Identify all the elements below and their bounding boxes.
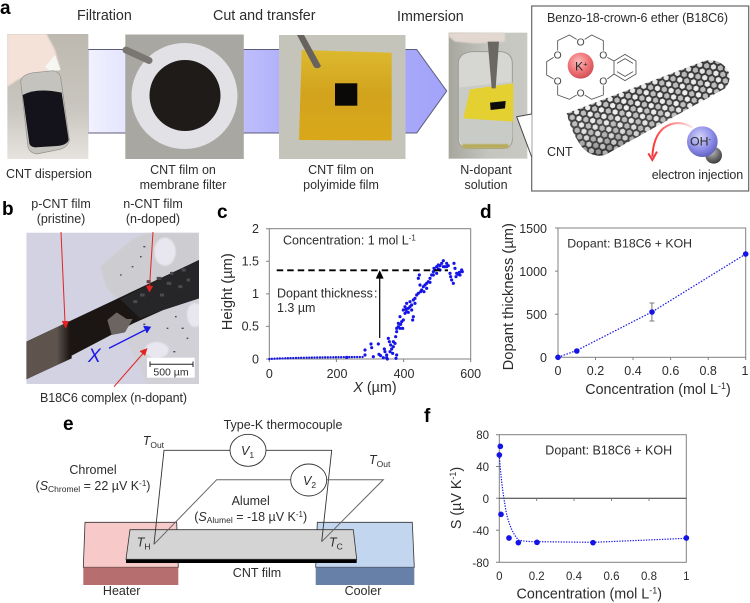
- x tick labels: 0.6: [604, 571, 620, 583]
- voltmeter V2: [291, 464, 327, 496]
- label: cooler: Cooler: [345, 584, 381, 598]
- label: dopant thickness: 1.3 µm: [277, 301, 315, 315]
- x axis title: -1: [649, 586, 657, 596]
- x tick labels: [555, 364, 749, 378]
- voltmeter V2: 2: [311, 480, 316, 490]
- x axis title: X (µm): [352, 380, 397, 396]
- axes frame: [499, 435, 686, 562]
- molecule: crown ether with K+: [547, 35, 636, 99]
- y tick labels: 0.5: [242, 320, 259, 334]
- panel b: micrograph: [2, 197, 203, 405]
- label: X axis direction: X: [87, 346, 102, 367]
- photo: N-dopant solution: [449, 33, 527, 159]
- red arrow to dopant: [114, 349, 147, 387]
- label: concentration: -1: [409, 234, 416, 242]
- label: dopant thickness: :: [374, 286, 377, 300]
- label: alumel: (S: [194, 510, 207, 524]
- voltmeter V1: [230, 434, 266, 466]
- panel letter b: b: [2, 199, 14, 220]
- label: dopant: Dopant: B18C6 + KOH: [567, 237, 692, 251]
- axes frame: [558, 228, 746, 357]
- panel f: Seebeck coefficient chart: [424, 406, 690, 602]
- red arrow to n-CNT: [147, 232, 153, 292]
- y axis title: S (µV K: [449, 480, 465, 529]
- electron injection arrow: [648, 123, 692, 160]
- carbon nanotube: [567, 60, 730, 156]
- label: T out right: Out: [377, 459, 391, 469]
- y tick labels: -40: [472, 526, 489, 538]
- voltmeter V1: 1: [249, 450, 254, 460]
- x tick labels: 0.4: [566, 571, 583, 583]
- label: T cold: T: [329, 536, 337, 550]
- label: T cold: C: [337, 542, 343, 552]
- voltmeter V1: V: [241, 444, 249, 458]
- molecule: crown ether with K+: O: [577, 37, 585, 48]
- red arrow to p-CNT: [61, 232, 68, 328]
- molecule: crown ether with K+: O: [599, 77, 607, 88]
- photo: CNT film on polyimide film: [279, 35, 406, 159]
- label: dopant: Dopant: B18C6 + KOH: [545, 443, 672, 457]
- micrograph image: [26, 233, 203, 384]
- label: chromel: ): [146, 479, 150, 493]
- y tick labels: [519, 222, 547, 365]
- hydroxide ion: OH: [690, 135, 708, 149]
- label: B18C6 complex: B18C6 complex (n-dopant): [40, 391, 187, 405]
- x axis title: Concentration (mol L: [585, 382, 718, 398]
- caption: N-dopant solution: N-dopant: [460, 163, 512, 177]
- x tick labels: 0: [555, 364, 562, 378]
- molecule: crown ether with K+: O: [554, 77, 562, 88]
- caption: N-dopant solution: solution: [464, 178, 508, 192]
- y tick labels: 2: [252, 222, 259, 236]
- thickness arrow: [377, 272, 383, 338]
- y tick labels: -80: [472, 558, 489, 570]
- label: alumel: Alumel: [232, 494, 270, 508]
- step label: cut and transfer: Cut and transfer: [213, 8, 316, 24]
- y axis title: ): [449, 467, 465, 472]
- scale bar: [147, 358, 195, 378]
- caption: CNT film on membrane filter: CNT film on: [150, 163, 216, 177]
- y tick labels: 1500: [519, 222, 547, 236]
- y tick labels: 1.5: [242, 254, 259, 268]
- label: heater: Heater: [103, 584, 140, 598]
- x tick labels: 0: [496, 571, 503, 583]
- chromel wires: [154, 450, 332, 544]
- x tick labels: 0.8: [641, 571, 657, 583]
- x axis title: ): [657, 586, 662, 602]
- data series: [555, 251, 748, 360]
- label: p-CNT film: p-CNT film: [31, 197, 91, 211]
- y tick labels: 0: [540, 351, 547, 365]
- voltmeter V2: V: [303, 474, 311, 488]
- panel a: fabrication flow: [0, 0, 749, 192]
- x axis title: Concentration (mol L: [517, 586, 649, 602]
- panel d: thickness vs concentration chart: [480, 202, 749, 398]
- y tick labels: 0: [483, 494, 489, 506]
- step label: filtration: Filtration: [77, 8, 132, 24]
- label: T out left: Out: [150, 440, 165, 450]
- label: T out right: T: [369, 453, 377, 467]
- y tick labels: [242, 222, 259, 366]
- axes frame: [269, 229, 471, 359]
- error bar: [650, 303, 654, 321]
- label: alumel: = -18 µV K: [233, 510, 297, 524]
- photo: CNT dispersion: [7, 34, 88, 159]
- x axis title: ): [726, 382, 731, 398]
- panel c: height profile chart: [217, 202, 481, 396]
- panel letter c: c: [217, 202, 228, 223]
- x tick labels: [266, 367, 481, 381]
- y tick labels: [472, 430, 489, 570]
- x tick labels: 600: [460, 367, 481, 381]
- label: chromel: = 22 µV K: [80, 479, 140, 493]
- process arrow: [88, 50, 447, 133]
- panel e: measurement schematic: [36, 414, 414, 598]
- heater block: [83, 522, 178, 585]
- label: CNT: CNT: [547, 145, 573, 159]
- label: chromel: Chromel: [48, 484, 80, 494]
- y tick labels: 0: [252, 352, 259, 366]
- molecule: crown ether with K+: +: [583, 59, 588, 68]
- y tick labels: 40: [476, 462, 489, 474]
- label: chromel: (S: [36, 479, 48, 493]
- label: CNT film: CNT film: [233, 566, 281, 580]
- molecule: crown ether with K+: K: [575, 59, 583, 73]
- label: p-CNT film: (pristine): [37, 212, 85, 226]
- photo: CNT film on membrane filter: [125, 34, 244, 159]
- hydroxide ion: -: [708, 135, 711, 144]
- molecule: crown ether with K+: O: [554, 51, 562, 62]
- scale bar: 500 µm: [153, 366, 189, 378]
- molecule: crown ether with K+: O: [599, 51, 607, 62]
- label: T hot: H: [144, 542, 150, 552]
- x tick labels: 200: [327, 367, 347, 381]
- x tick labels: 0.4: [624, 364, 642, 378]
- alumel wires: [154, 480, 383, 544]
- x tick labels: 0.2: [587, 364, 604, 378]
- x tick labels: [496, 571, 690, 583]
- hydroxide ion: [687, 126, 722, 164]
- y tick labels: 80: [476, 430, 489, 442]
- cooler block: [316, 522, 414, 585]
- y tick labels: 1000: [519, 265, 547, 279]
- caption: CNT film on membrane filter: membrane filter: [140, 178, 226, 192]
- label: T hot: T: [137, 536, 144, 550]
- callout: B18C6 on CNT: [517, 6, 749, 191]
- x tick labels: 400: [394, 367, 414, 381]
- y axis title: Dopant thickness (µm): [501, 223, 517, 370]
- label: alumel: ): [303, 510, 307, 524]
- label: Type-K thermocouple: Type-K thermocouple: [224, 418, 342, 432]
- panel letter e: e: [63, 414, 74, 435]
- label: dopant thickness: Dopant thickness: [277, 286, 373, 300]
- x axis title: -1: [718, 381, 726, 391]
- label: T out left: T: [143, 434, 150, 448]
- step label: immersion: Immersion: [397, 9, 464, 25]
- dashed level line: [277, 269, 448, 271]
- caption: CNT film on polyimide film: polyimide film: [303, 178, 379, 192]
- y axis title: Height (µm): [220, 253, 236, 330]
- label: chromel: Chromel: [69, 463, 117, 477]
- x tick labels: 0.2: [529, 571, 545, 583]
- label: alumel: -1: [296, 510, 304, 519]
- blue X direction arrow: [109, 326, 150, 348]
- x tick labels: 0.8: [700, 364, 717, 378]
- label: concentration: Concentration: 1 mol L: [283, 234, 409, 248]
- x tick labels: 0.6: [662, 364, 679, 378]
- CNT film: [126, 530, 357, 563]
- panel letter f: f: [424, 406, 431, 427]
- caption: CNT film on polyimide film: CNT film on: [308, 163, 374, 177]
- data series: [496, 443, 689, 545]
- molecule: crown ether with K+: O: [577, 88, 585, 99]
- callout title: Benzo-18-crown-6 ether (B18C6): [547, 11, 728, 25]
- x tick labels: 1: [742, 364, 749, 378]
- x tick labels: 0: [266, 367, 273, 381]
- caption: CNT dispersion: CNT dispersion: [6, 167, 92, 181]
- y tick labels: 1: [252, 287, 259, 301]
- label: alumel: Alumel: [207, 515, 233, 525]
- panel letter d: d: [480, 202, 492, 223]
- label: n-CNT film: (n-doped): [126, 212, 180, 226]
- label: electron injection: electron injection: [652, 168, 743, 182]
- y axis title: -1: [448, 472, 458, 480]
- x tick labels: 1: [683, 571, 690, 583]
- label: chromel: -1: [139, 479, 147, 488]
- y tick labels: 500: [526, 308, 547, 322]
- data points: [269, 261, 462, 359]
- label: n-CNT film: n-CNT film: [123, 197, 183, 211]
